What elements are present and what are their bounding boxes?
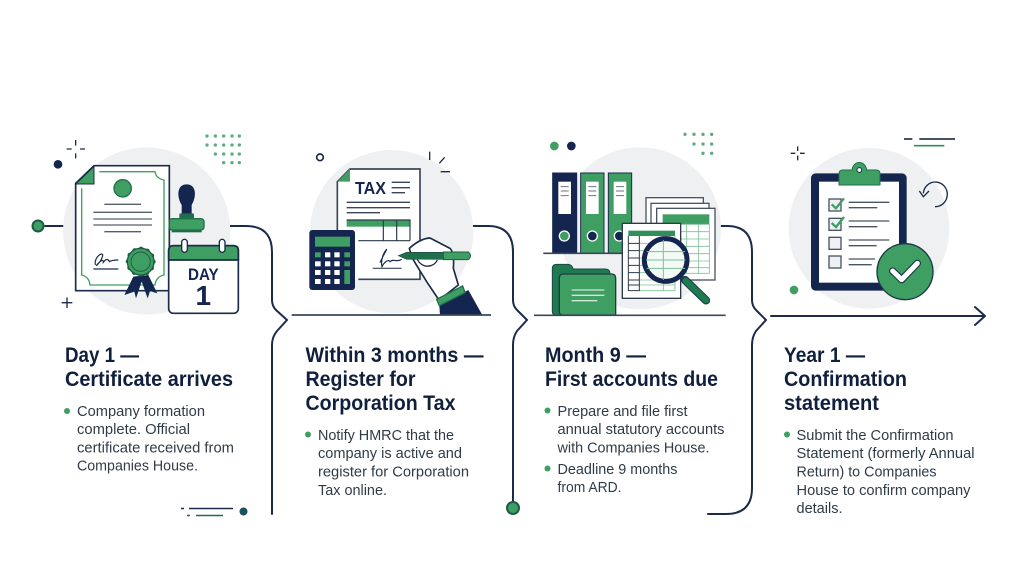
decoration: lines and dot xyxy=(181,508,248,516)
background circle xyxy=(63,147,230,315)
text block: day 1 details: complete. Official xyxy=(77,422,190,438)
timeline connector: step 3 to step 4 xyxy=(708,226,766,514)
illustration: tax form, calculator and hand xyxy=(292,150,491,315)
text block: day 1 details: Company formation xyxy=(77,404,205,420)
heading: year 1: Confirmation xyxy=(784,368,907,391)
text block: day 1 details xyxy=(64,404,234,474)
decoration: dots xyxy=(550,133,713,155)
icon: stamp xyxy=(169,184,204,232)
text block: accounts details: Deadline 9 months xyxy=(558,462,678,478)
icon: stacked spreadsheets xyxy=(646,198,715,280)
decoration: sparkle, dot and lines xyxy=(790,139,955,294)
text block: accounts details: annual statutory accounts xyxy=(558,422,724,438)
heading: month 9 xyxy=(545,344,718,391)
heading: month 9: First accounts due xyxy=(545,368,718,391)
text block: accounts details: with Companies House. xyxy=(557,440,710,456)
panel: step 1 day 1 xyxy=(54,134,247,515)
heading: year 1 xyxy=(784,344,907,415)
text block: day 1 details: Companies House. xyxy=(77,458,198,474)
text block: corporation tax details: company is active and xyxy=(318,446,462,462)
icon: folder xyxy=(552,264,616,315)
panel: step 2 within 3 months xyxy=(292,150,491,499)
timeline connector: start to step 2 xyxy=(32,220,287,514)
text block: confirmation details: Submit the Confirmation xyxy=(796,428,954,444)
panel: step 3 month 9 xyxy=(534,133,726,496)
text block: accounts details xyxy=(544,404,724,496)
icon: magnifying glass xyxy=(644,239,706,300)
heading: within 3 months: Register for xyxy=(306,368,416,391)
heading: within 3 months: Corporation Tax xyxy=(306,392,456,415)
heading: day 1: Certificate arrives xyxy=(65,368,233,391)
text block: confirmation details: Statement (formerly Annual xyxy=(796,446,974,462)
text block: corporation tax details: Notify HMRC that the xyxy=(318,428,454,444)
text block: accounts details: from ARD. xyxy=(558,480,622,496)
timeline arrow xyxy=(771,307,985,325)
icon: rosette seal xyxy=(124,248,157,298)
icon: certificate xyxy=(76,166,169,291)
baseline xyxy=(534,313,726,318)
text block: corporation tax details: register for Corporation xyxy=(318,464,469,480)
heading: day 1 xyxy=(65,344,233,391)
icon: hand with pen xyxy=(398,238,482,315)
icon: clipboard xyxy=(811,162,907,291)
background circle xyxy=(310,150,473,313)
icon: calendar xyxy=(169,239,238,313)
illustration: clipboard checklist xyxy=(789,139,955,309)
illustration: certificate, stamp and calendar xyxy=(54,134,241,315)
icon: approved check badge xyxy=(877,244,933,300)
icon: calendar: DAY xyxy=(188,265,219,284)
text block: confirmation details: details. xyxy=(796,501,842,517)
icon: tax form xyxy=(337,169,420,279)
illustration: binders, folder and spreadsheets xyxy=(534,133,726,315)
timeline connector: step 2 to step 3 xyxy=(473,226,527,514)
icon: tax form: TAX xyxy=(355,178,386,198)
heading: year 1: Year 1 — xyxy=(784,344,865,367)
text block: accounts details: Prepare and file first xyxy=(558,404,688,420)
decoration: ring and rays xyxy=(317,152,450,172)
icon: calculator xyxy=(309,230,355,290)
icon: binders xyxy=(543,173,633,253)
panel: step 4 year 1 xyxy=(784,139,974,517)
icon: renew arrow xyxy=(919,182,947,207)
text block: confirmation details xyxy=(784,428,974,517)
background circle xyxy=(559,147,721,309)
text block: day 1 details: certificate received from xyxy=(77,440,234,456)
decoration: sparkle, dots and plus xyxy=(54,134,241,308)
heading: within 3 months: Within 3 months — xyxy=(306,344,484,367)
text block: confirmation details: House to confirm company xyxy=(796,483,971,499)
text block: corporation tax details xyxy=(305,428,469,499)
icon: front spreadsheet xyxy=(622,223,681,298)
heading: month 9: Month 9 — xyxy=(545,344,646,367)
baseline xyxy=(292,312,491,317)
heading: within 3 months xyxy=(306,344,484,415)
text block: confirmation details: Return) to Companies xyxy=(796,464,936,480)
text block: corporation tax details: Tax online. xyxy=(318,483,387,499)
icon: calendar: 1 xyxy=(196,280,211,311)
heading: day 1: Day 1 — xyxy=(65,344,139,367)
background circle xyxy=(789,148,949,309)
heading: year 1: statement xyxy=(784,392,879,415)
